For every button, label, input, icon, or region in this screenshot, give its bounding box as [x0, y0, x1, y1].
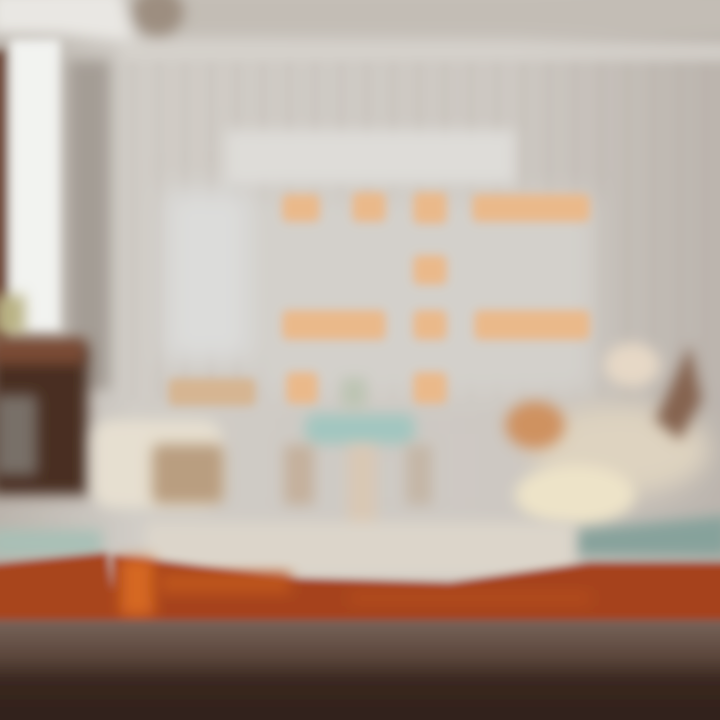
- row 2 block: [413, 255, 447, 285]
- row 3 blocks: [282, 310, 590, 340]
- wooden table front: [0, 620, 720, 720]
- orange chart blocks: [168, 192, 590, 406]
- orange-red book band: [0, 552, 720, 630]
- left bedding with box: [92, 420, 224, 508]
- right cat on blankets: [505, 343, 720, 556]
- row 1 blocks: [282, 192, 590, 224]
- table objects: teal tray and bottles: [284, 378, 432, 530]
- chart sheet: [165, 190, 595, 395]
- ceiling and top fixture: [0, 0, 184, 42]
- row 4 blocks: [168, 372, 447, 406]
- white board heading area: [225, 130, 515, 185]
- left wooden furniture: [0, 338, 88, 495]
- window with pillar: [0, 40, 110, 390]
- white sheet below: [0, 522, 575, 577]
